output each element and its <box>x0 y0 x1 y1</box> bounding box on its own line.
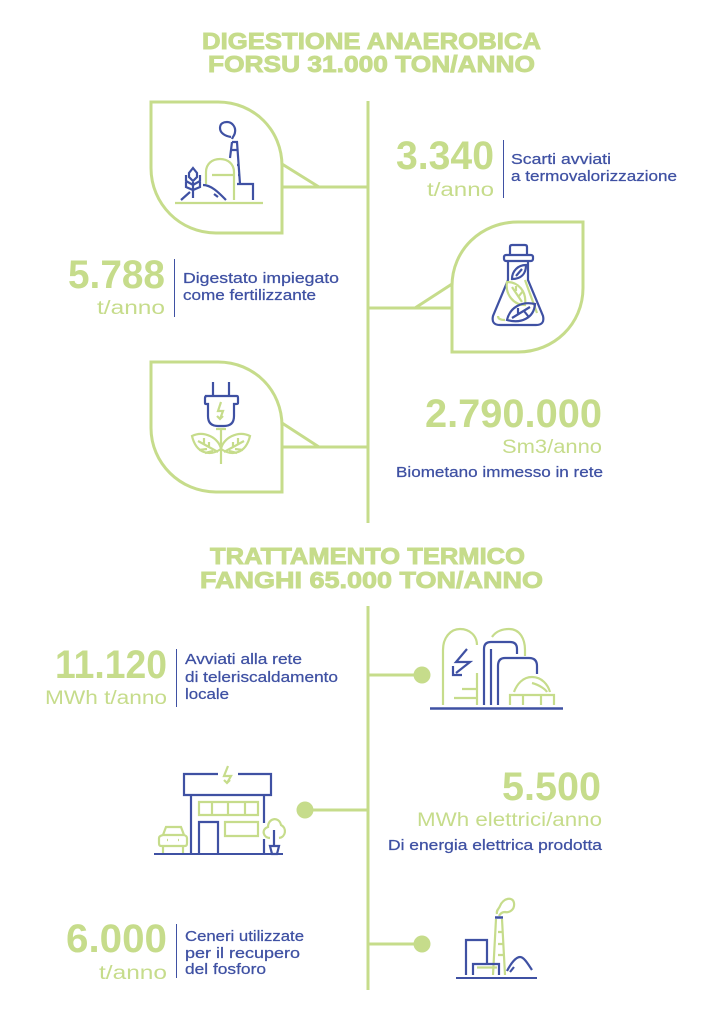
stat: 5.500 energia elettrica: MWh elettrici/anno <box>417 810 602 831</box>
icon: flask with leaves <box>493 245 543 325</box>
stat: 6.000 ceneri: t/anno <box>99 963 167 984</box>
timeline: digestione anaerobica <box>366 101 370 523</box>
connector: dot 1 <box>368 666 430 684</box>
stat: 6.000 ceneri: Ceneri utilizzate <box>185 928 304 945</box>
heading: digestione anaerobica <box>202 28 541 77</box>
stat: 11.120 teleriscaldamento: 11.120 <box>55 643 167 687</box>
connector: dot 2 <box>296 802 368 818</box>
panel: leaf with plug and plant <box>151 362 368 492</box>
icon: biogas plant <box>175 122 263 203</box>
panel: leaf with biogas plant <box>151 102 368 233</box>
heading: digestione anaerobica: DIGESTIONE ANAEROBICA <box>202 28 541 54</box>
stat: 11.120 teleriscaldamento: di teleriscaldamento <box>185 669 338 686</box>
stat: 3.340 scarti <box>396 134 677 201</box>
connector: dot 3 <box>368 936 430 952</box>
stat: 5.500 energia elettrica: Di energia elettrica prodotta <box>388 837 603 854</box>
stat: 3.340 scarti: 3.340 <box>396 134 494 178</box>
stat: 2.790.000 biometano: Biometano immesso in rete <box>396 464 603 481</box>
stat: 6.000 ceneri: per il recupero <box>185 945 300 962</box>
stat: 5.788 digestato <box>68 253 339 319</box>
stat: 5.788 digestato: come fertilizzante <box>183 287 316 304</box>
stat: 11.120 teleriscaldamento: locale <box>185 686 229 703</box>
stat: 3.340 scarti: t/anno <box>427 180 494 201</box>
stat: 5.788 digestato: Digestato impiegato <box>183 270 339 287</box>
stat: 11.120 teleriscaldamento <box>45 643 338 709</box>
stat: 2.790.000 biometano: Sm3/anno <box>502 437 602 458</box>
stat: 5.500 energia elettrica: 5.500 <box>502 765 601 809</box>
icon: thermal plant <box>430 629 563 708</box>
stat: 5.788 digestato: 5.788 <box>68 253 165 297</box>
stat: 2.790.000 biometano: 2.790.000 <box>425 392 602 436</box>
stat: 2.790.000 biometano <box>396 392 603 481</box>
icon: building with car and tree <box>154 766 285 854</box>
stat: 11.120 teleriscaldamento: MWh t/anno <box>45 688 167 709</box>
heading: trattamento termico <box>200 543 543 593</box>
panel: leaf with flask <box>368 222 583 352</box>
stat: 6.000 ceneri: 6.000 <box>66 917 167 961</box>
stat: 3.340 scarti: Scarti avviati <box>511 151 611 168</box>
stat: 11.120 teleriscaldamento: Avviati alla rete <box>185 651 302 668</box>
heading: trattamento termico: TRATTAMENTO TERMICO <box>210 543 525 569</box>
stat: 5.788 digestato: t/anno <box>97 298 165 319</box>
heading: digestione anaerobica: FORSU 31.000 TON/ANNO <box>208 51 535 77</box>
icon: plant with ash heap <box>456 899 537 978</box>
stat: 6.000 ceneri <box>66 917 304 984</box>
stat: 3.340 scarti: a termovalorizzazione <box>511 168 677 185</box>
stat: 5.500 energia elettrica <box>388 765 603 854</box>
icon: plug with plant <box>192 382 250 464</box>
heading: trattamento termico: FANGHI 65.000 TON/ANNO <box>200 567 543 593</box>
stat: 6.000 ceneri: del fosforo <box>185 961 266 978</box>
timeline: trattamento termico <box>366 606 370 990</box>
